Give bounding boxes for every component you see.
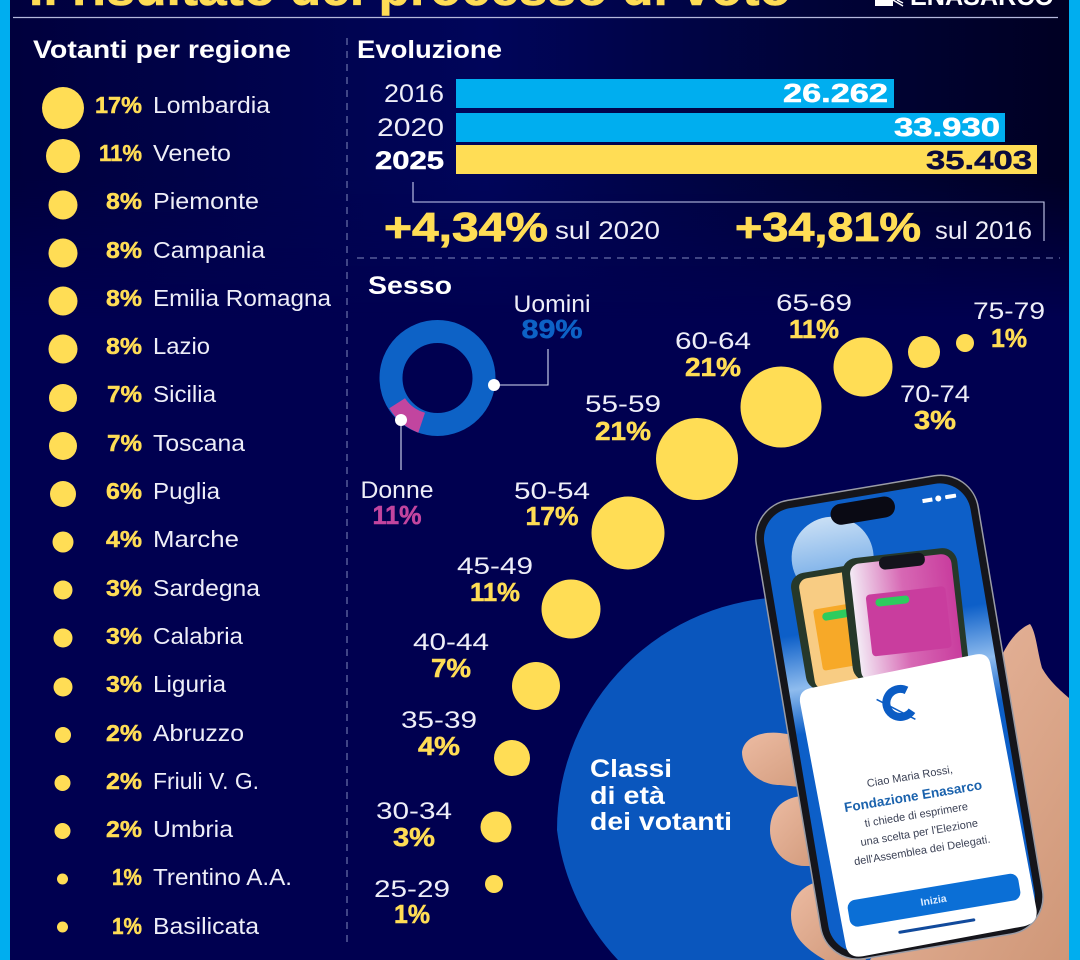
row: Emilia Romagna: Emilia Romagna [153,285,331,311]
age 30-34: 3% [393,822,435,852]
row: Lombardia: Lombardia [153,92,270,118]
row: Lazio [48,333,210,364]
row: Campania: 8% [106,237,142,263]
age 50-54 [514,478,664,570]
age 70-74: 3% [914,405,956,435]
row: Campania [48,237,265,268]
heading: classi di età dei votanti: Classi [590,755,672,783]
row: Sicilia [49,381,216,412]
panel: votanti per regione [33,36,331,939]
age 60-64: 21% [685,352,741,382]
phone screen [759,479,1040,957]
age 35-39: 4% [418,731,460,761]
age 70-74 [900,336,970,435]
row: Piemonte: Piemonte [153,188,259,214]
age 70-74: 70-74 [900,381,970,408]
bar: 2020: 2020 [377,114,444,142]
heading: classi di età dei votanti [590,755,732,836]
hand behind phone [742,624,1069,960]
phone body [756,475,1043,959]
row: Abruzzo [55,720,244,746]
age 25-29 [374,875,503,929]
row: Lazio: 8% [106,333,142,359]
row: Puglia: 6% [106,478,142,504]
row: Puglia [50,478,220,507]
row: Lazio: Lazio [153,333,210,359]
row: Sardegna: Sardegna [153,575,260,601]
age 40-44: 7% [431,653,471,683]
greeting text: dell'Assemblea dei Delegati. [853,834,991,868]
callout: uomini: Uomini [514,291,590,318]
row: Piemonte: 8% [106,188,142,214]
age 40-44: 40-44 [413,629,489,656]
stat: +34,81% sul 2016 [735,204,1032,250]
age 40-44 [413,629,560,710]
home indicator [898,918,976,934]
heading: classi di età dei votanti: di età [590,782,665,810]
age 25-29: 25-29 [374,876,450,903]
bar: 2016: 2016 [384,80,444,108]
row: Sardegna: 3% [106,575,142,601]
row: Basilicata: 1% [112,913,142,939]
row: Veneto [46,139,231,173]
app card [797,651,1039,960]
bracket connector [413,182,1044,241]
row: Umbria: Umbria [153,816,233,842]
row: Friuli V. G.: 2% [106,768,142,794]
row: Friuli V. G.: Friuli V. G. [153,768,259,794]
bar: 2016: 26.262 [783,78,888,108]
row: Emilia Romagna [48,285,331,316]
row: Calabria: 3% [106,623,142,649]
callout: donne: 11% [372,500,422,530]
row: Toscana [49,430,245,460]
row: Liguria: 3% [106,671,142,697]
age 50-54: 17% [526,501,578,531]
greeting text: ti chiede di esprimere [864,801,969,830]
row: Veneto: Veneto [153,140,231,166]
row: Liguria [54,671,226,697]
panel: sesso [360,272,590,530]
age 65-69: 65-69 [776,290,852,317]
panel: evoluzione [357,36,1044,250]
row: Trentino A.A. [57,864,292,890]
row: Abruzzo: 2% [106,720,142,746]
notch [829,495,897,526]
chart: classi di età [374,290,1045,929]
age 45-49 [457,553,600,638]
row: Sicilia: Sicilia [153,381,216,407]
age 55-59: 55-59 [585,391,661,418]
sun shape [785,511,880,605]
bar: 2025 [375,145,1037,175]
greeting text: Ciao Maria Rossi, [866,764,954,790]
row: Toscana: Toscana [153,430,245,456]
greeting text [840,760,992,868]
row: Piemonte [48,188,259,220]
row: Calabria [54,623,243,649]
bar: 2025: 35.403 [926,145,1032,175]
row: Marche [52,526,239,552]
age 35-39: 35-39 [401,707,477,734]
row: Veneto: 11% [99,140,142,166]
mini phone: orange [789,564,877,692]
row: Umbria: 2% [106,816,142,842]
row: Marche: Marche [153,526,239,552]
bar: 2020 [377,112,1005,142]
heading: classi di età dei votanti: dei votanti [590,808,732,836]
row: Sardegna [54,575,260,601]
button: inizia [846,873,1022,928]
heading: votanti per regione: Votanti per regione [33,36,291,64]
age 30-34 [376,798,512,852]
age 35-39 [401,707,530,776]
row: Calabria: Calabria [153,623,243,649]
stat: +4,34% sul 2020 [384,204,660,250]
row: Emilia Romagna: 8% [106,285,142,311]
row: Basilicata: Basilicata [153,913,259,939]
age 55-59 [585,391,738,500]
age 50-54: 50-54 [514,478,590,505]
stat: +4,34% sul 2020: +4,34% [384,204,548,250]
age 60-64: 60-64 [675,328,751,355]
heading: evoluzione: Evoluzione [357,36,502,64]
row: Lombardia [42,87,270,129]
row: Trentino A.A.: Trentino A.A. [153,864,292,890]
phone face [759,479,1040,960]
greeting text: Fondazione Enasarco [843,777,983,815]
age 55-59: 21% [595,416,651,446]
row: Liguria: Liguria [153,671,226,697]
status icons [922,493,957,504]
greeting text: una scelta per l'Elezione [860,817,979,849]
row: Lombardia: 17% [95,92,142,118]
phone mockup [756,475,1043,960]
age 60-64 [675,328,822,448]
row: Sicilia: 7% [107,381,142,407]
age 75-79 [956,298,1045,353]
row: Campania: Campania [153,237,265,263]
bar: 2020: 33.930 [894,112,1000,142]
mini phone: pink [840,547,970,683]
donut chart [389,332,484,433]
heading: sesso: Sesso [368,272,452,300]
row: Umbria [54,816,233,842]
age 45-49: 11% [470,577,520,607]
age 65-69 [776,290,892,396]
bar: 2025: 2025 [375,147,444,175]
blue circle background [557,597,1023,960]
age 65-69: 11% [789,314,839,344]
bar: 2016 [384,78,894,108]
row: Abruzzo: Abruzzo [153,720,244,746]
row: Friuli V. G. [54,768,259,794]
age 25-29: 1% [394,899,430,929]
stat: +34,81% sul 2016: sul 2016 [935,217,1032,245]
age 45-49: 45-49 [457,553,533,580]
button: inizia: Inizia [920,893,948,909]
callout: donne: Donne [360,477,434,504]
stat: +4,34% sul 2020: sul 2020 [555,217,660,245]
age 30-34: 30-34 [376,798,452,825]
callout: uomini [488,291,590,391]
row: Toscana: 7% [107,430,142,456]
age 75-79: 75-79 [973,298,1045,325]
age 75-79: 1% [991,323,1027,353]
row: Marche: 4% [106,526,142,552]
callout: uomini: 89% [522,314,582,344]
row: Trentino A.A.: 1% [112,864,142,890]
app logo [876,687,915,725]
stat: +34,81% sul 2016: +34,81% [735,204,921,250]
row: Puglia: Puglia [153,478,220,504]
callout: donne [360,414,434,530]
row: Basilicata [57,913,259,939]
